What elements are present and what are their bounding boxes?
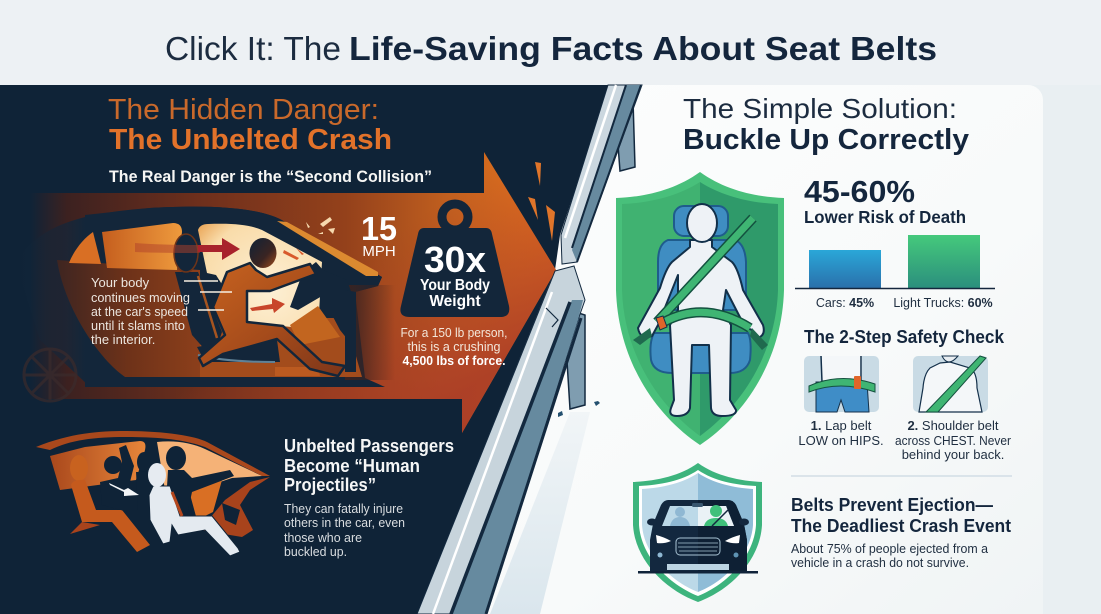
text: human projectiles detail: buckled up. [284, 544, 347, 559]
shadow wedge beneath guardrail [490, 412, 590, 614]
caption: step 2: 2. Shoulder belt [907, 418, 999, 433]
ground line [638, 571, 758, 574]
icon: green shield with belted person [616, 172, 784, 445]
belted driver [710, 505, 722, 517]
bar label: light trucks: Light Trucks: 60% [893, 296, 993, 310]
rail: lower section [417, 266, 585, 614]
mirror [692, 503, 703, 507]
dark passenger with raised arm [100, 445, 134, 512]
icon: weight 30x body weight: 30x [424, 239, 486, 280]
heading: the simple solution: Buckle Up Correctly [683, 124, 969, 156]
plate [667, 564, 729, 570]
driver seat [174, 234, 280, 362]
bar label: cars: Cars: 45% [816, 296, 874, 310]
hood shade [345, 285, 395, 380]
illustration: passengers as human projectiles [36, 431, 270, 556]
heading: the hidden danger: The Unbelted Crash [109, 124, 392, 156]
cabin roof strip [36, 431, 270, 476]
text: body continues moving [91, 275, 190, 347]
headlights [656, 535, 740, 543]
passenger in orange [70, 455, 150, 552]
bar: cars [809, 250, 881, 288]
text: ejection survival [791, 542, 988, 570]
rear quarter window [69, 232, 101, 264]
icon: weight 30x body weight: Your Body [420, 277, 490, 294]
text: 4,500 lbs of force [400, 325, 508, 368]
heading: 2-step safety check: The 2-Step Safety Check [804, 327, 1005, 347]
title: Click It: The [165, 30, 341, 67]
stat: 45-60 percent: 45-60% [804, 174, 915, 209]
panel: the hidden danger [0, 85, 610, 614]
text: human projectiles heading: Unbelted Passengers [284, 436, 454, 456]
icon: weight 30x body weight [400, 204, 509, 317]
text: human projectiles detail: They can fatally injure [284, 501, 403, 516]
text: human projectiles detail: others in the car, even [284, 515, 405, 530]
icon: shield with car [633, 463, 762, 602]
stat: 15 mph: MPH [362, 243, 396, 260]
broken post: lower [566, 310, 585, 409]
text: human projectiles heading: Projectiles” [284, 475, 376, 495]
text: 4,500 lbs of force: this is a crushing [408, 339, 500, 354]
lap belt [664, 312, 750, 328]
heading: belts prevent ejection [791, 495, 1011, 536]
red motion arrow: lower [250, 298, 285, 313]
stat: 15 mph: 15 [361, 210, 397, 247]
fog lights [658, 552, 662, 558]
impact marks [306, 217, 335, 234]
stat: 45-60 percent [804, 174, 966, 227]
cabin dash panels [188, 480, 222, 520]
text: 4,500 lbs of force: For a 150 lb person, [400, 325, 508, 340]
caption: step 1: 1. Lap belt [811, 418, 872, 433]
icon: lap belt low on hips [804, 356, 879, 412]
car silhouette [15, 207, 382, 387]
text: 4,500 lbs of force: 4,500 lbs of force. [402, 354, 506, 368]
side mirrors [647, 518, 657, 526]
subheading: second collision: The Real Danger is the “Second Collision” [109, 167, 432, 186]
bar chart: lower risk by vehicle [795, 235, 995, 310]
big orange arrow [30, 152, 556, 433]
text: ejection survival: vehicle in a crash do not survive. [791, 556, 969, 570]
interior right lower [200, 318, 362, 377]
red motion arrow: upper [135, 238, 240, 260]
heading: the hidden danger [108, 94, 392, 156]
text: human projectiles detail: those who are [284, 530, 362, 545]
panel: the simple solution background [400, 85, 1043, 614]
rail: upper section [561, 85, 642, 264]
stat: 45-60 percent: Lower Risk of Death [804, 207, 966, 227]
text: body continues moving: Your body [91, 275, 150, 290]
heading: the simple solution: The Simple Solution: [683, 93, 957, 124]
heading: belts prevent ejection: Belts Prevent Ejection— [791, 495, 993, 515]
windshield strip [277, 221, 378, 276]
text: ejection survival: About 75% of people ejected from a [791, 542, 988, 556]
speed lines [184, 281, 232, 310]
icon: shoulder belt across chest [913, 356, 988, 412]
rear side window [102, 223, 182, 270]
ghost passenger [675, 507, 685, 517]
caption: step 1 [798, 418, 884, 448]
lower dash patch [290, 306, 340, 345]
dashboard and steering wheel [290, 262, 354, 345]
text: body continues moving: at the car's speed [91, 304, 188, 319]
person [638, 204, 764, 416]
text: body continues moving: the interior. [91, 332, 155, 347]
seat [650, 206, 751, 373]
heading: the simple solution [683, 93, 969, 156]
text: body continues moving: until it slams into [91, 318, 185, 333]
front side window [198, 224, 322, 330]
debris fragments [528, 162, 555, 241]
caption: step 2: behind your back. [902, 447, 1004, 462]
icon: weight 30x body weight: Weight [429, 293, 481, 310]
text: body continues moving: continues moving [91, 290, 190, 305]
illustration: driver thrown forward inside car [15, 207, 395, 401]
text: human projectiles detail [284, 501, 405, 559]
text: human projectiles heading: Become “Human [284, 456, 420, 476]
broken post: upper [618, 100, 635, 171]
bar: light trucks [908, 235, 980, 288]
grille [676, 538, 720, 555]
shoulder belt [657, 218, 753, 322]
rear wheel [24, 349, 76, 401]
caption: step 1: LOW on HIPS. [798, 433, 884, 448]
white projectile passenger [148, 463, 240, 556]
debris chips [558, 401, 600, 417]
heading: the hidden danger: The Hidden Danger: [108, 94, 379, 126]
caption: step 2 [895, 418, 1012, 462]
text: human projectiles heading [284, 436, 454, 495]
cabin front window [157, 441, 262, 492]
caption: step 2: across CHEST. Never [895, 433, 1012, 448]
car [647, 500, 749, 572]
heading: belts prevent ejection: The Deadliest Crash Event [791, 516, 1011, 536]
dark front passenger [136, 446, 234, 520]
title header band [0, 0, 1101, 85]
title: Life-Saving Facts About Seat Belts [349, 30, 937, 67]
driver figure [199, 238, 345, 376]
door panel [57, 260, 200, 377]
cabin rear window [50, 441, 145, 490]
guardrail divider [417, 85, 642, 614]
buckle [656, 316, 667, 330]
belt anchors [633, 328, 768, 350]
white arrow [109, 483, 139, 496]
